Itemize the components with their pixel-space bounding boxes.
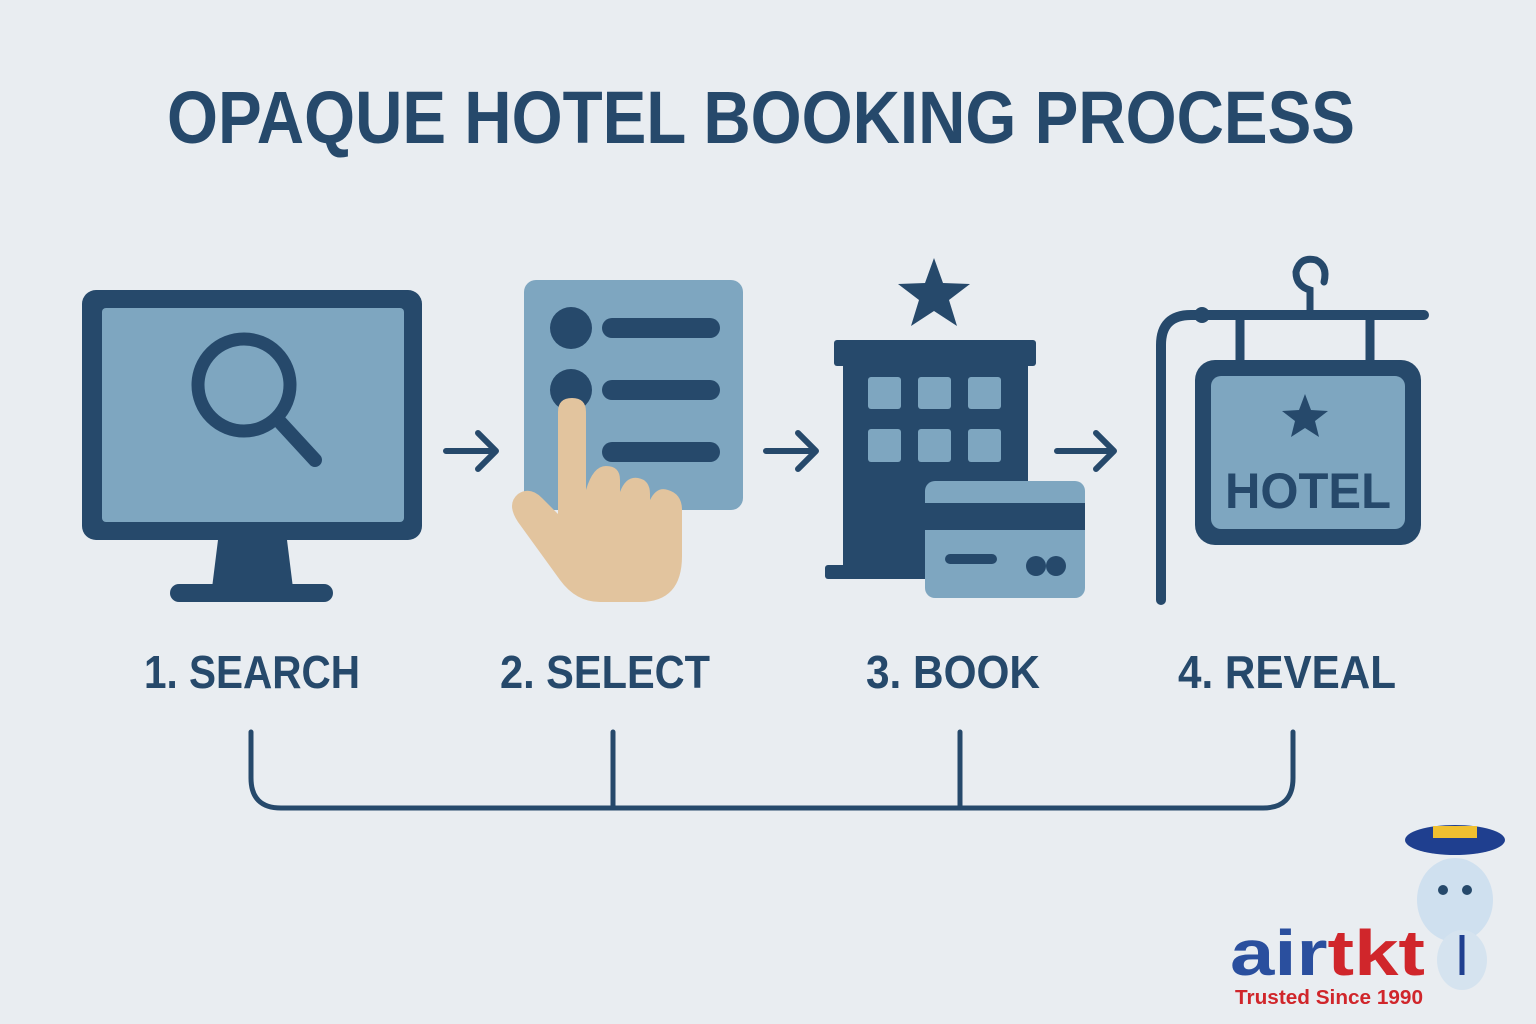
step labels: 4. REVEAL — [1178, 646, 1396, 698]
step labels — [144, 646, 1396, 698]
icon: monitor with search — [82, 290, 422, 602]
logo: airtkt mascot — [1405, 825, 1505, 990]
title: OPAQUE HOTEL BOOKING PROCESS — [167, 76, 1355, 159]
arrow 3 — [1057, 433, 1114, 469]
logo text: air tkt — [1230, 917, 1425, 989]
step labels: 2. SELECT — [500, 646, 710, 698]
step labels: 3. BOOK — [866, 646, 1040, 698]
icon: hotel with card — [825, 258, 1085, 598]
arrow 1 — [446, 433, 496, 469]
arrow 2 — [766, 433, 816, 469]
logo text: Trusted Since 1990 — [1235, 987, 1423, 1009]
timeline bracket — [251, 732, 1293, 808]
icon: hotel sign: HOTEL — [1225, 463, 1391, 519]
icon: hotel sign — [1161, 259, 1424, 600]
step labels: 1. SEARCH — [144, 646, 360, 698]
icon: list with hand — [512, 280, 743, 602]
